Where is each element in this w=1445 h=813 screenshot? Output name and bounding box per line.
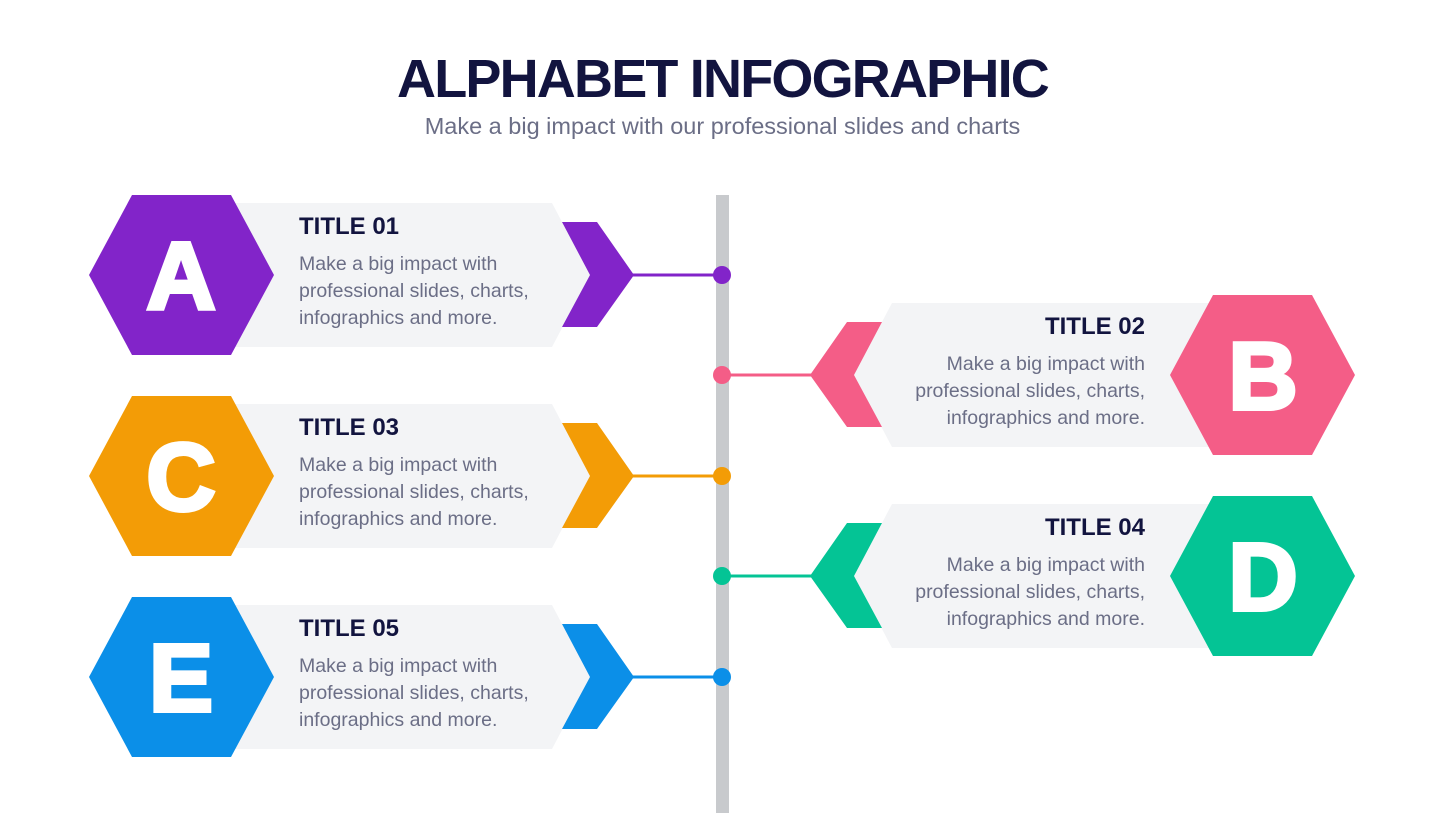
item B: B <box>1228 323 1298 430</box>
item A: TITLE 01 <box>299 213 399 240</box>
title: ALPHABET INFOGRAPHIC <box>397 49 1048 109</box>
item A: A <box>146 223 216 330</box>
item B <box>713 295 1355 455</box>
item D: professional slides, charts, <box>915 581 1145 603</box>
item E: infographics and more. <box>299 709 497 731</box>
item B: Make a big impact with <box>947 353 1145 375</box>
item C <box>89 396 731 556</box>
item C: C <box>146 424 216 531</box>
item C: TITLE 03 <box>299 414 399 441</box>
subtitle: Make a big impact with our professional slides and charts <box>425 113 1020 139</box>
item E: professional slides, charts, <box>299 682 529 704</box>
item A: infographics and more. <box>299 307 497 329</box>
item E: Make a big impact with <box>299 655 497 677</box>
item A: professional slides, charts, <box>299 280 529 302</box>
item B: TITLE 02 <box>1045 313 1145 340</box>
item A: Make a big impact with <box>299 253 497 275</box>
item E: E <box>149 625 213 732</box>
item D: TITLE 04 <box>1045 514 1146 541</box>
item D <box>713 496 1355 656</box>
item C: infographics and more. <box>299 508 497 530</box>
item B: infographics and more. <box>947 407 1145 429</box>
item D: D <box>1228 524 1298 631</box>
item D: Make a big impact with <box>947 554 1145 576</box>
item B: professional slides, charts, <box>915 380 1145 402</box>
timeline bar <box>716 195 729 813</box>
item D: infographics and more. <box>947 608 1145 630</box>
item E <box>89 597 731 757</box>
item E: TITLE 05 <box>299 615 399 642</box>
item C: Make a big impact with <box>299 454 497 476</box>
item C: professional slides, charts, <box>299 481 529 503</box>
item A <box>89 195 731 355</box>
